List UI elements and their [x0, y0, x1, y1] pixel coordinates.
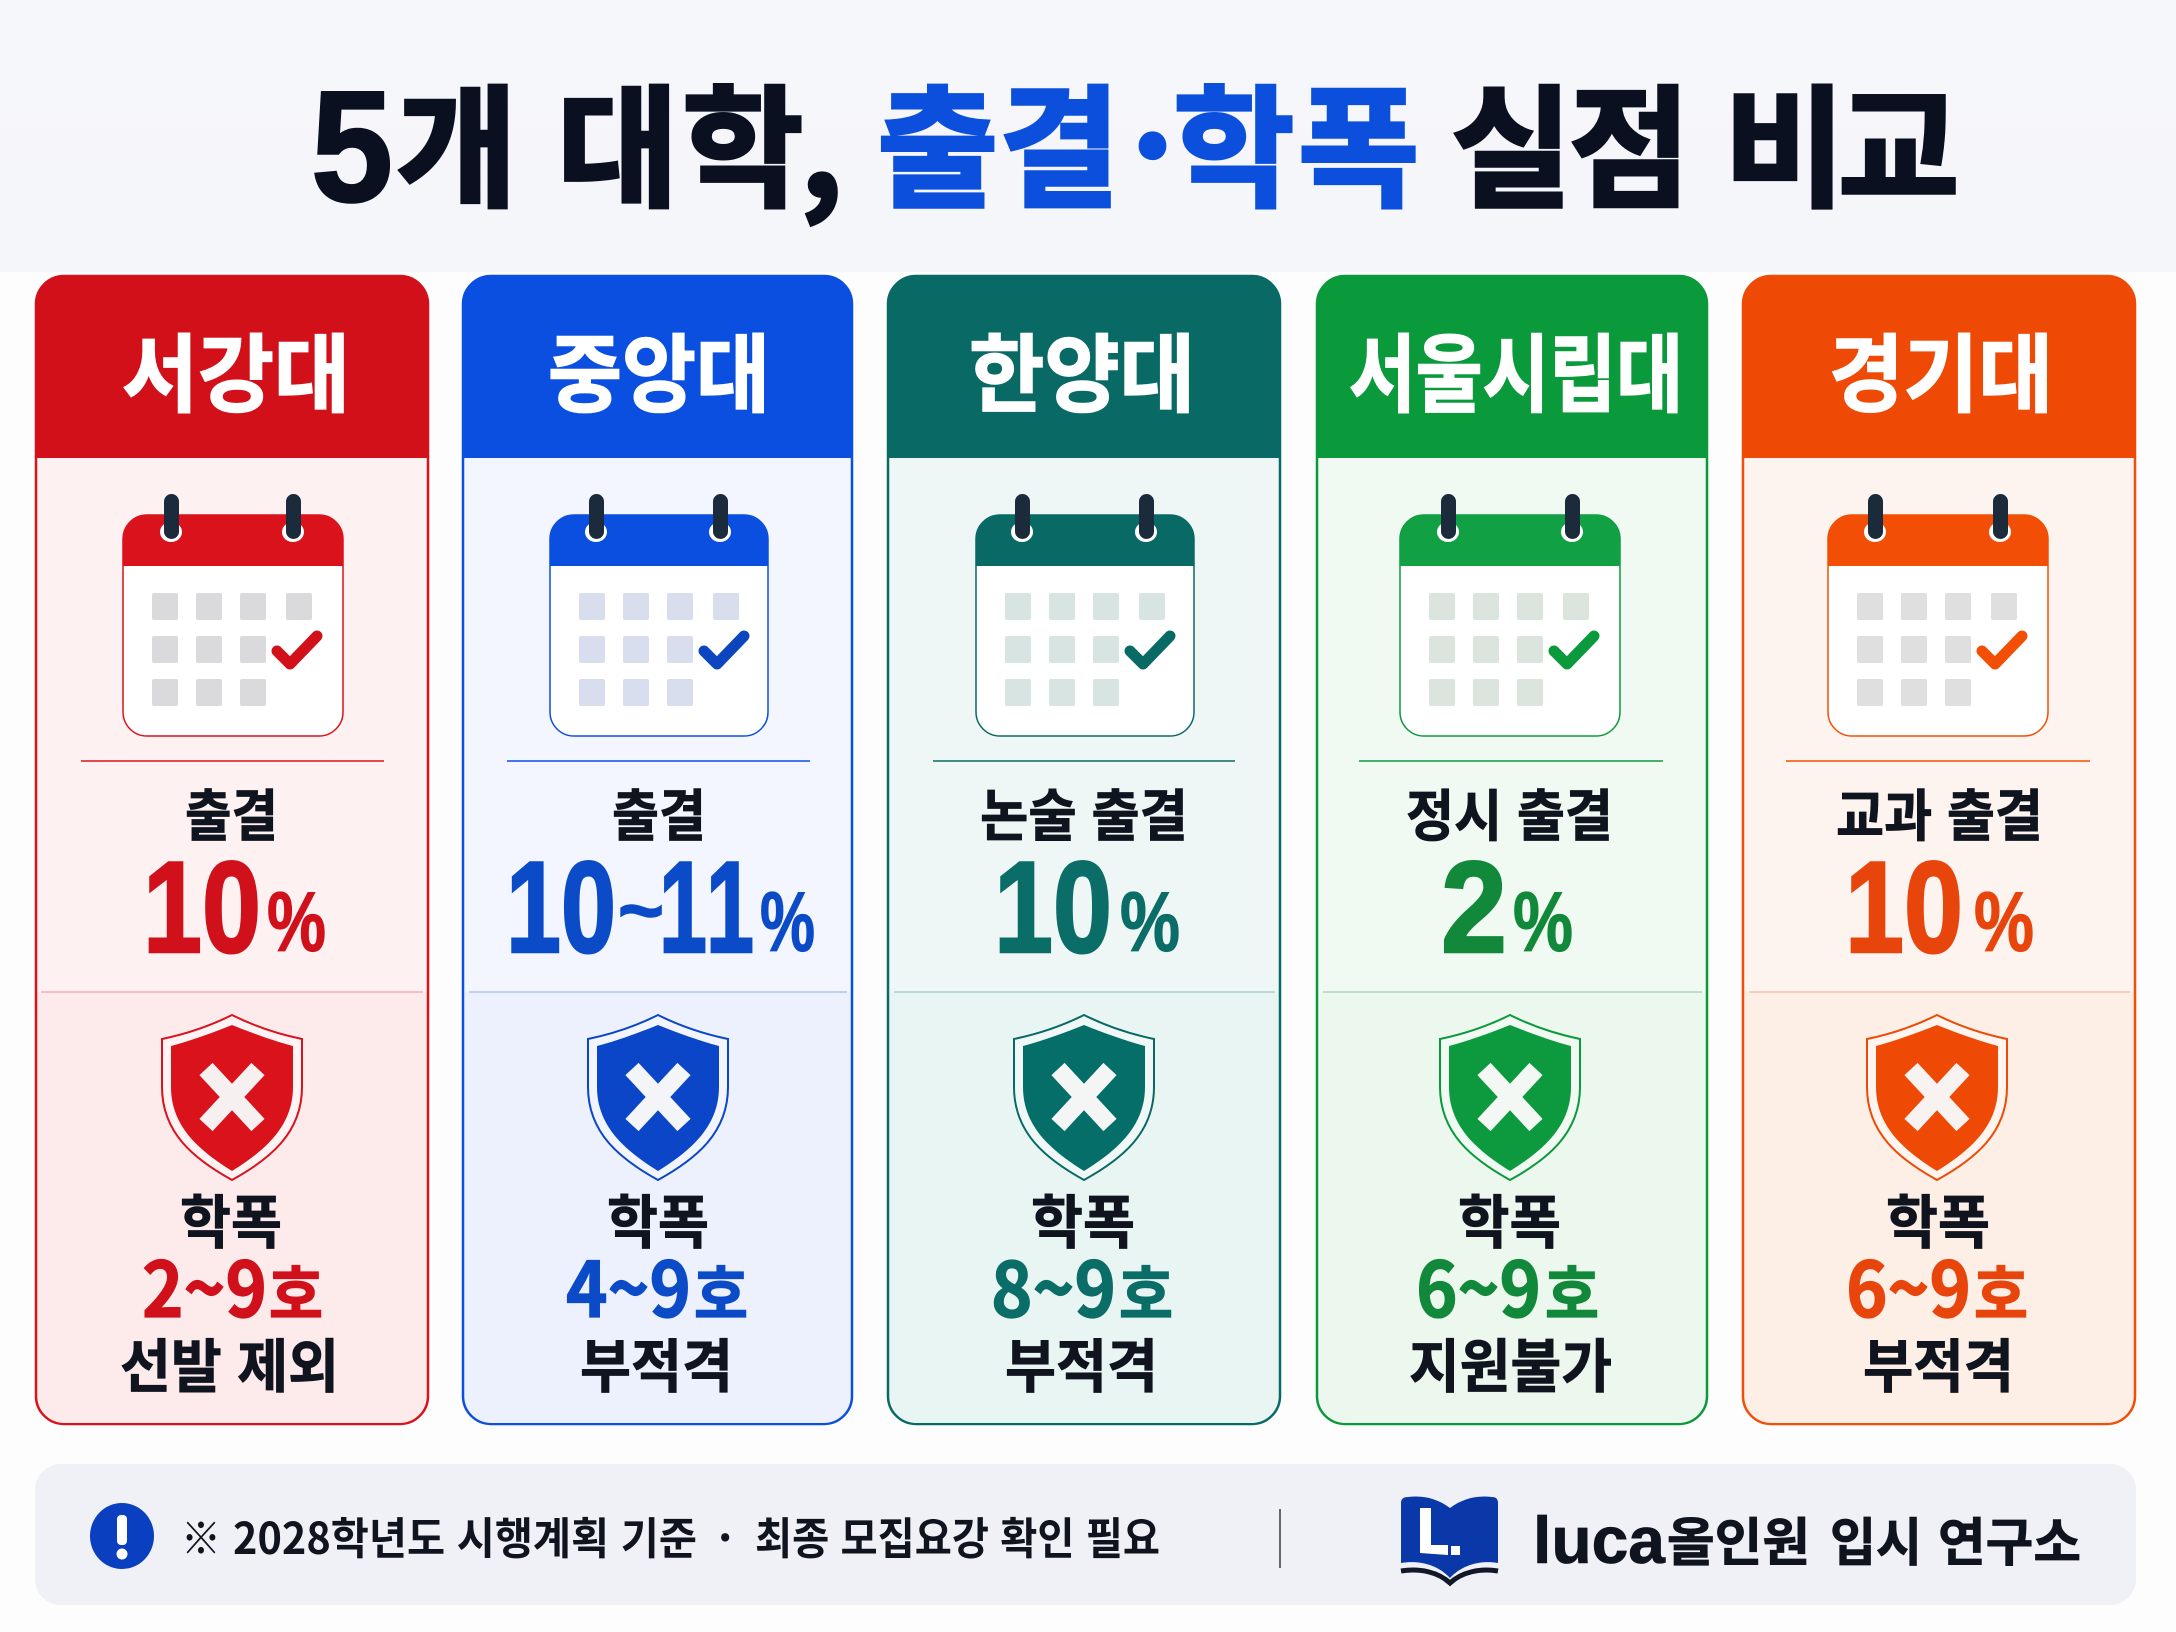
label: school violence: 학폭 — [607, 1176, 709, 1260]
value: attendance penalty: % — [1974, 875, 2034, 969]
value: attendance penalty: 10 — [143, 834, 261, 980]
icon: calendar — [123, 494, 343, 736]
value: disposition range: 호 — [269, 1245, 323, 1335]
icon: shield with x — [162, 1015, 302, 1180]
value: attendance penalty — [1441, 834, 1573, 980]
icon: shield with x — [588, 1015, 728, 1180]
note text: 최종 모집요강 확인 필요 — [755, 1503, 1160, 1567]
icon: calendar — [550, 494, 768, 736]
value: disposition range: 8~9 — [991, 1229, 1116, 1339]
label: attendance: 출결 — [185, 772, 278, 853]
label: school violence: 학폭 — [180, 1176, 282, 1260]
value: disposition range: 6~9 — [1416, 1229, 1541, 1339]
brand text: 입시 — [1830, 1501, 1922, 1576]
value: attendance penalty: 10 — [1845, 834, 1963, 980]
value: attendance penalty — [506, 834, 815, 980]
text: result: 부적격 — [580, 1320, 733, 1404]
heading: 서울시립대: 서울시립대 — [1349, 307, 1683, 430]
panel: 경기대 — [1742, 276, 2136, 1424]
brand text: 연구소 — [1938, 1501, 2081, 1576]
value: attendance penalty: 2 — [1441, 834, 1507, 980]
value: attendance penalty: 10 — [994, 834, 1112, 980]
value: attendance penalty: 1 — [706, 834, 754, 980]
label: school violence: 학폭 — [1031, 1176, 1135, 1260]
value: disposition range: 호 — [694, 1245, 748, 1335]
text: result: 부적격 — [1863, 1320, 2014, 1404]
value: disposition range: 호 — [1545, 1245, 1599, 1335]
value: attendance penalty: % — [1513, 875, 1573, 969]
note text: · — [718, 1503, 732, 1567]
note text — [181, 1503, 1160, 1567]
label: regular admission attendance: 정시 출결 — [1406, 772, 1613, 853]
text: result: 부적격 — [1005, 1320, 1158, 1404]
icon: shield with x — [1867, 1015, 2007, 1180]
heading: 중앙대: 중앙대 — [548, 307, 770, 430]
icon: open book logo — [1401, 1496, 1498, 1583]
icon: calendar — [1828, 494, 2048, 736]
heading: 경기대: 경기대 — [1829, 307, 2053, 430]
label: attendance: 출결 — [612, 772, 706, 853]
icon: calendar — [1400, 494, 1620, 736]
value: attendance penalty: ~ — [618, 868, 664, 953]
value: disposition range: 호 — [1119, 1245, 1173, 1335]
value: disposition range: 2~9 — [142, 1229, 267, 1339]
icon: shield with x — [1014, 1015, 1154, 1180]
brand text — [1533, 1501, 2081, 1577]
value: disposition range: 6~9 — [1846, 1229, 1971, 1339]
title: 실점 비교 — [1451, 44, 1959, 235]
note text: 2028학년도 시행계획 기준 — [233, 1503, 697, 1567]
icon: calendar — [976, 494, 1194, 736]
value: attendance penalty: 10 — [506, 834, 616, 980]
title — [311, 44, 1959, 235]
icon: exclamation — [90, 1503, 154, 1569]
panel: 중앙대 — [462, 276, 853, 1424]
brand text: 올인원 — [1667, 1501, 1810, 1576]
heading: 한양대: 한양대 — [969, 307, 1195, 430]
label: school violence: 학폭 — [1458, 1176, 1561, 1260]
value: attendance penalty: 1 — [659, 834, 707, 980]
icon: shield with x — [1440, 1015, 1580, 1180]
value: disposition range: 호 — [1974, 1245, 2028, 1335]
panel: 서강대 — [35, 276, 429, 1424]
value: disposition range: 4~9 — [566, 1229, 691, 1339]
label: subject admission attendance: 교과 출결 — [1836, 772, 2043, 853]
panel: 서울시립대 — [1316, 276, 1708, 1424]
brand text: luca — [1533, 1503, 1666, 1577]
label: essay attendance: 논술 출결 — [980, 772, 1188, 853]
title: 5 — [311, 59, 393, 235]
title: 출결·학폭 — [877, 44, 1419, 235]
panel: 한양대 — [887, 276, 1281, 1424]
footer bar — [35, 1464, 2136, 1605]
value: attendance penalty: % — [760, 875, 815, 969]
heading: 서강대: 서강대 — [122, 307, 350, 430]
note text: ※ — [181, 1503, 221, 1567]
value: attendance penalty: % — [1120, 875, 1180, 969]
title: 개 대학, — [396, 44, 843, 235]
text: result: 선발 제외 — [120, 1320, 339, 1404]
value: attendance penalty: % — [267, 875, 326, 969]
text: result: 지원불가 — [1409, 1320, 1612, 1404]
label: school violence: 학폭 — [1886, 1176, 1990, 1260]
